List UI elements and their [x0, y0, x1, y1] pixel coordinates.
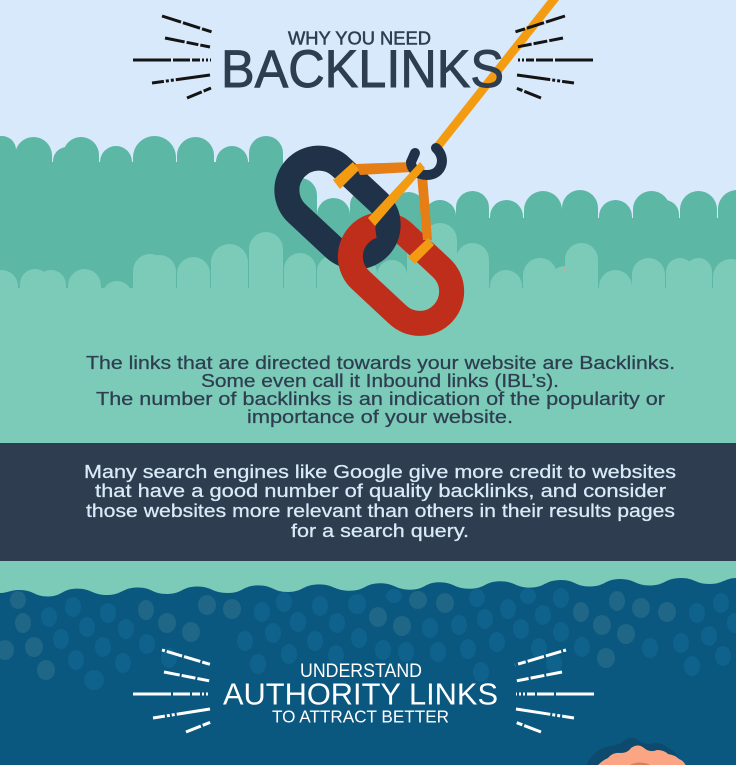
- connecting ropes: [355, 162, 432, 240]
- text block: backlinks definition: The number of backlinks is an indication of the popularity or: [96, 389, 665, 409]
- burst lines: heading right: [515, 16, 593, 98]
- dark chain link: [274, 145, 401, 270]
- sky background: [0, 0, 736, 300]
- heading line: why you need: WHY YOU NEED: [288, 28, 431, 48]
- burst lines: section right: [515, 650, 594, 732]
- heading line: understand: UNDERSTAND: [300, 661, 422, 682]
- muted bubble pattern: [0, 591, 676, 680]
- text block: backlinks definition: The links that are directed towards your website are Backlinks.: [86, 353, 675, 373]
- dark link overlap: [375, 207, 401, 244]
- badge face: [597, 746, 686, 765]
- panel: search engine credit band: [0, 443, 736, 561]
- icon: scalloped badge: [586, 738, 686, 765]
- front hedge: [0, 223, 736, 461]
- rope: [435, 0, 559, 148]
- text block: search engine credit: that have a good number of quality backlinks, and consider: [95, 481, 666, 501]
- burst lines: section left: [133, 650, 212, 732]
- text block: search engine credit: those websites more relevant than others in their results pages: [86, 501, 675, 521]
- text block: backlinks definition: importance of your website.: [247, 407, 513, 427]
- heading line: authority links: AUTHORITY LINKS: [223, 676, 498, 712]
- strap on red link: [408, 238, 434, 264]
- heading: understand authority links: [223, 661, 498, 726]
- badge inner arc: [624, 762, 656, 765]
- text block: backlinks definition: Some even call it Inbound links (IBL’s).: [201, 371, 559, 391]
- text block: search engine credit: [84, 462, 676, 541]
- burst lines: heading left: [133, 16, 212, 98]
- back hedge: [0, 136, 736, 322]
- heading: why you need backlinks: [221, 28, 504, 99]
- text block: search engine credit: for a search query.: [291, 521, 469, 541]
- bubble pattern: [41, 588, 736, 690]
- badge shadow: [586, 738, 680, 765]
- red chain link: [337, 211, 465, 337]
- hook: [411, 148, 442, 175]
- heading line: backlinks: BACKLINKS: [221, 40, 504, 99]
- text block: search engine credit: Many search engines like Google give more credit to websites: [84, 462, 676, 482]
- panel: navy wavy section: [0, 578, 736, 765]
- strap on dark link: [333, 162, 359, 189]
- icon: chain links on hook: [274, 145, 465, 337]
- heading line: to attract better: TO ATTRACT BETTER: [272, 706, 449, 726]
- teal strip: [0, 561, 736, 601]
- main diagonal strap: [368, 162, 425, 226]
- text block: backlinks definition: [86, 353, 675, 427]
